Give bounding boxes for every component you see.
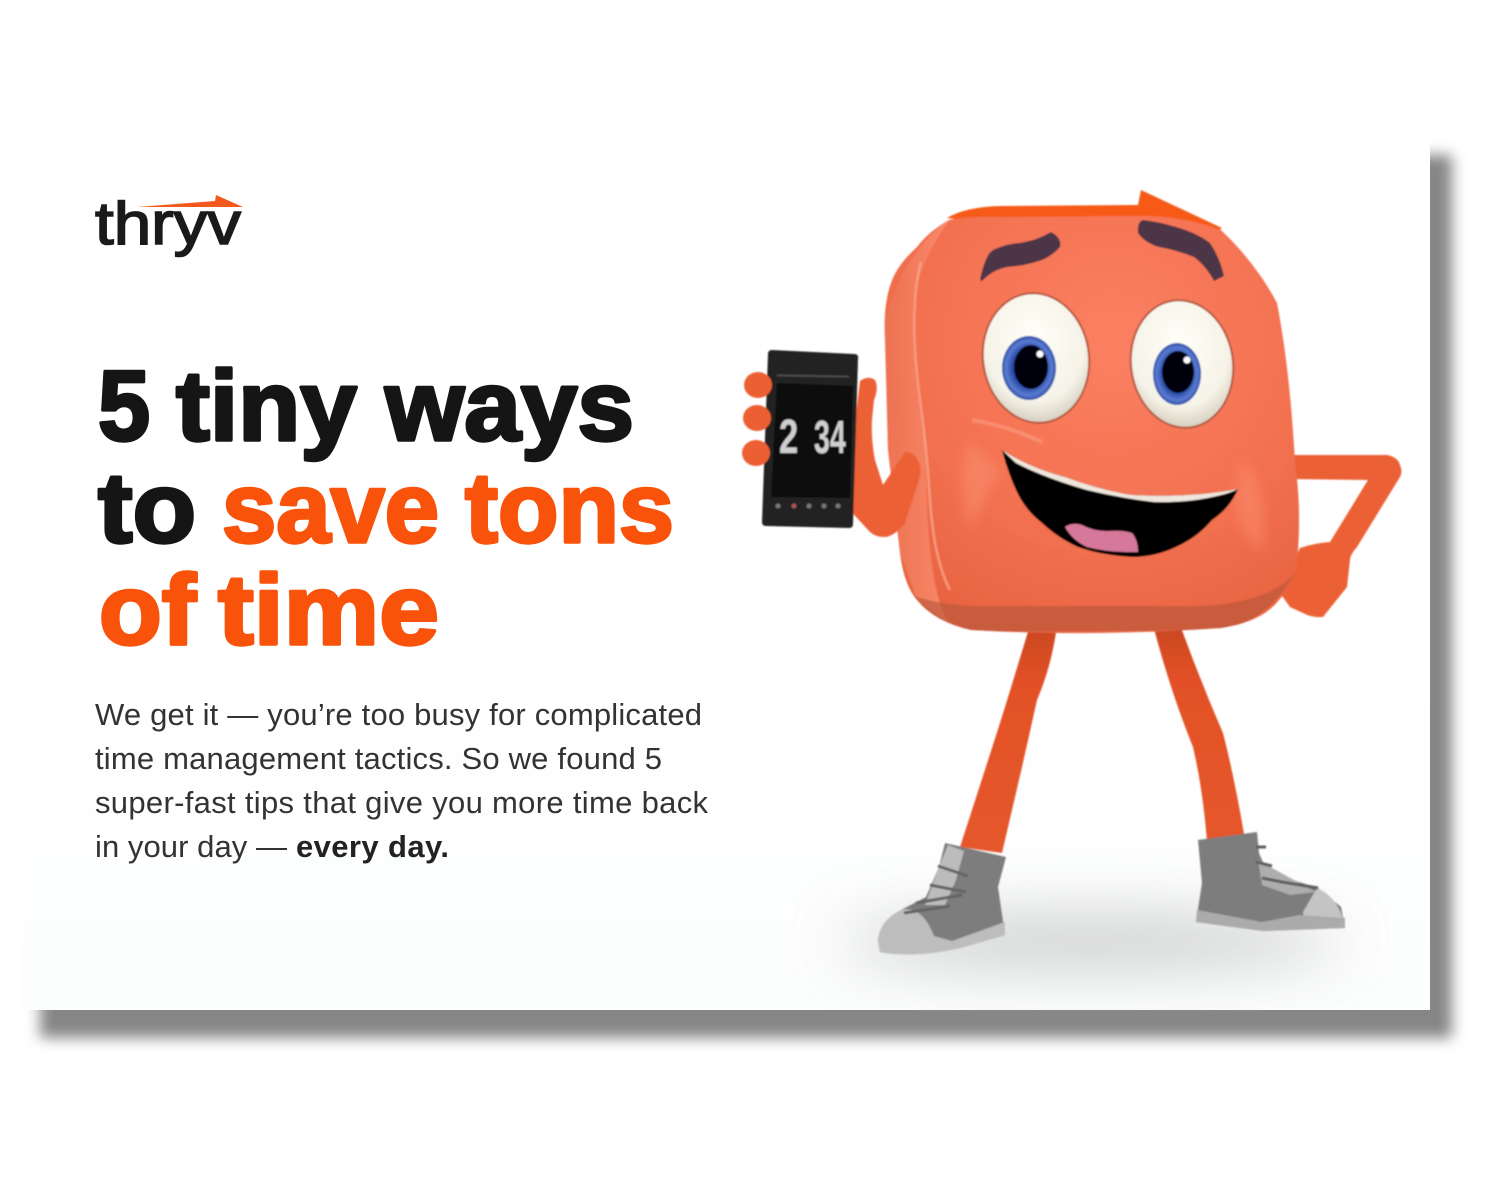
left shoe: [878, 843, 1006, 954]
fingers: [742, 372, 772, 466]
title: tons: [465, 452, 674, 563]
right leg: [1153, 625, 1245, 842]
title: to: [98, 452, 196, 563]
right eyebrow: [1138, 220, 1224, 281]
character mascot: [742, 190, 1402, 954]
clock digits: 2: [779, 409, 798, 463]
ground shadow: [840, 916, 1340, 968]
intro paragraph: We get it — you’re too busy for complicated: [95, 697, 702, 732]
left eye: [973, 285, 1099, 431]
head top arrow: [947, 190, 1222, 240]
smile crease: [972, 420, 1042, 442]
title: tiny ways: [176, 350, 634, 461]
phone: [762, 350, 858, 528]
panel: white card with drop shadow: [30, 145, 1462, 1048]
logo: thryv: thryv: [95, 190, 241, 257]
left side band: [885, 220, 950, 625]
right shoe: [1196, 832, 1345, 931]
intro paragraph: in your day —: [95, 829, 287, 864]
title: 5: [98, 350, 150, 461]
intro paragraph: super-fast tips that give you more time back: [95, 785, 708, 820]
intro paragraph: [95, 697, 708, 864]
body: [885, 216, 1299, 633]
left arm holding phone: [845, 378, 920, 537]
mouth: [1002, 450, 1238, 557]
body shading: [885, 220, 1297, 632]
phone: 34: [814, 412, 846, 464]
title: [98, 350, 674, 665]
cheek left shade: [962, 440, 1000, 530]
right eye: [1121, 292, 1243, 436]
lower face shade: [914, 574, 1294, 632]
intro paragraph: every day.: [296, 829, 449, 864]
intro paragraph: time management tactics. So we found 5: [95, 741, 662, 776]
title: of: [99, 554, 197, 665]
left leg: [960, 625, 1057, 853]
right arm on hip: [1280, 455, 1402, 617]
title: save: [222, 452, 439, 563]
title: time: [218, 554, 439, 665]
left eyebrow: [980, 232, 1060, 281]
